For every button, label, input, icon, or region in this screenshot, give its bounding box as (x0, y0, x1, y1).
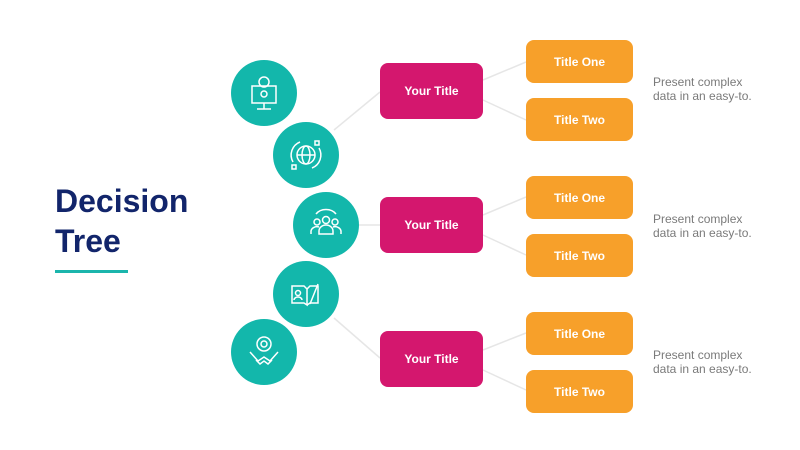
icon: globe (273, 122, 339, 188)
box: title two 1 (526, 98, 633, 141)
title (55, 183, 188, 259)
box: your title 3: Your Title (404, 352, 459, 366)
box: title two 2 (526, 234, 633, 277)
box: title two 3: Title Two (554, 384, 605, 398)
text 1: Present complex (653, 75, 742, 89)
title: Decision (55, 183, 188, 219)
box: title one 3 (526, 312, 633, 355)
text 3: data in an easy-to. (653, 362, 752, 376)
text 3 (653, 348, 752, 376)
text 2: data in an easy-to. (653, 226, 752, 240)
box: your title 2 (380, 197, 483, 253)
text 3: Present complex (653, 348, 742, 362)
icon: computer gear (231, 60, 297, 126)
box: title one 1 (526, 40, 633, 83)
icon: team (293, 192, 359, 258)
box: title two 1: Title Two (554, 112, 605, 126)
box: your title 2: Your Title (404, 218, 459, 232)
box: your title 1: Your Title (404, 84, 459, 98)
icon: book pen (273, 261, 339, 327)
icon: handshake gear (231, 319, 297, 385)
box: title one 1: Title One (554, 54, 605, 68)
box: title one 2 (526, 176, 633, 219)
text 2 (653, 212, 752, 240)
title: Tree (55, 223, 121, 259)
box: title one 3: Title One (554, 326, 605, 340)
text 2: Present complex (653, 212, 742, 226)
box: title two 2: Title Two (554, 248, 605, 262)
text 1 (653, 75, 752, 103)
title underline (55, 270, 128, 273)
box: title two 3 (526, 370, 633, 413)
box: your title 3 (380, 331, 483, 387)
box: your title 1 (380, 63, 483, 119)
text 1: data in an easy-to. (653, 89, 752, 103)
box: title one 2: Title One (554, 190, 605, 204)
